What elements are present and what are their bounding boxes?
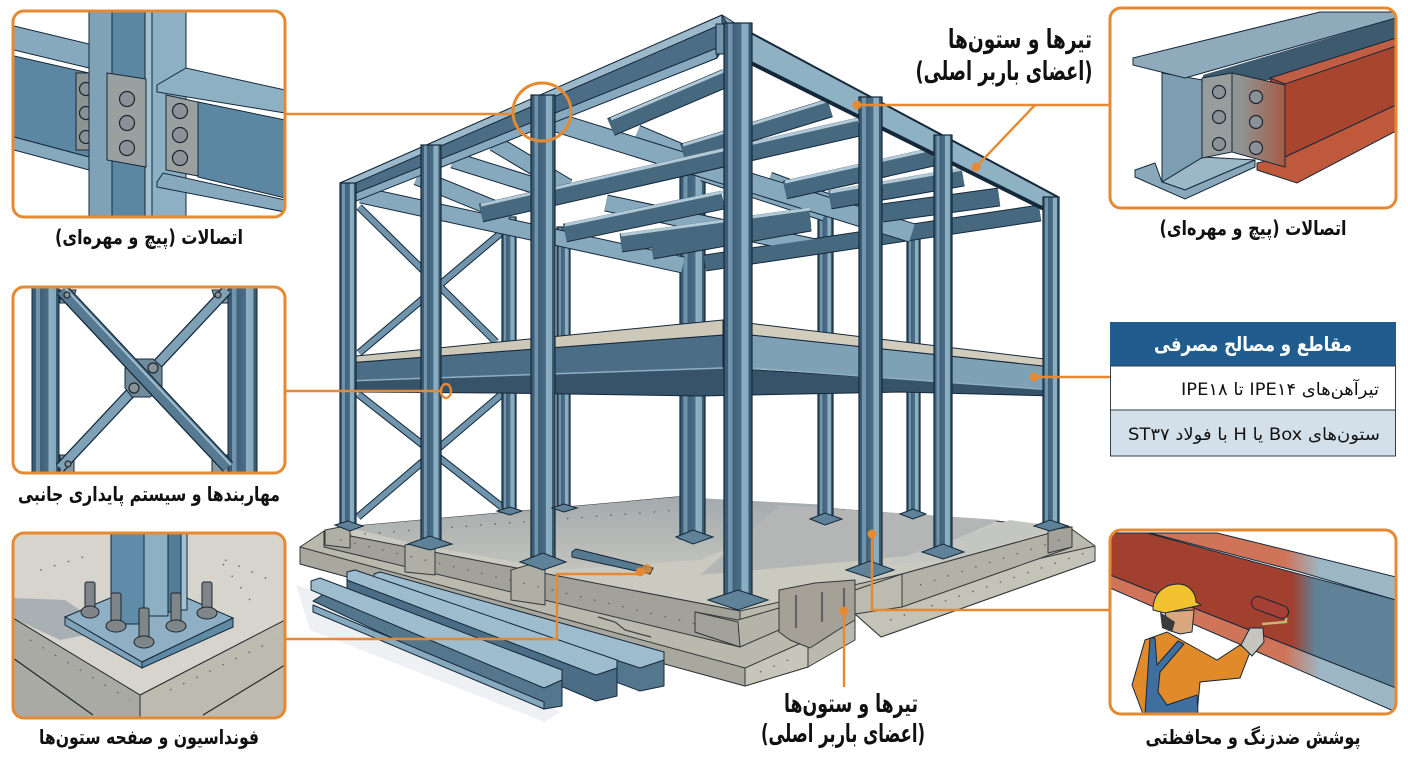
label: connections left: اتصالات (پیچ و مهره‌ای) bbox=[55, 225, 243, 250]
heading: beams and columns bottom: تیرها و ستون‌ها bbox=[784, 689, 918, 719]
icon: paint roller bbox=[1258, 603, 1286, 624]
panel: bracing bbox=[13, 287, 285, 473]
roof beams and joists bbox=[340, 15, 1058, 265]
table: sections and materials bbox=[1110, 322, 1396, 456]
main illustration: steel frame building bbox=[296, 15, 1095, 722]
heading: beams and columns top: تیرها و ستون‌ها bbox=[948, 25, 1092, 55]
heading: beams and columns bottom bbox=[761, 689, 925, 749]
callout line: foundation center label bbox=[840, 606, 848, 687]
callout line: materials table bbox=[1030, 372, 1111, 382]
callout line: foundation bbox=[285, 564, 652, 639]
base plates bbox=[335, 504, 1068, 610]
label: coating: پوشش ضدزنگ و محافظتی bbox=[1146, 725, 1360, 750]
panel: beam connection detail bbox=[1110, 8, 1396, 208]
rear columns bbox=[502, 165, 920, 539]
foundation slab bbox=[300, 497, 1095, 686]
heading: beams and columns top bbox=[916, 25, 1092, 87]
label: bracing: مهاربندها و سیستم پایداری جانبی bbox=[18, 482, 280, 507]
callout line: connection detail to roof joint bbox=[285, 83, 571, 141]
table: sections and materials: تیرآهن‌های IPE۱۴ تا IPE۱۸ bbox=[1181, 378, 1379, 400]
table: sections and materials: ستون‌های Box یا H با فولاد ST۳۷ bbox=[1128, 425, 1380, 445]
table: sections and materials: مقاطع و مصالح مصرفی bbox=[1154, 332, 1352, 356]
heading: beams and columns top: (اعضای باربر اصلی) bbox=[916, 57, 1092, 87]
callout line: beams and columns top bbox=[852, 100, 1111, 172]
panel: bolted connection bbox=[13, 11, 285, 217]
callout line: bracing to floor bbox=[285, 384, 451, 398]
label: connections right: اتصالات (پیچ و مهره‌ای) bbox=[1160, 216, 1346, 241]
back bracing X bbox=[358, 207, 502, 517]
panel: anti-rust coating bbox=[1110, 530, 1396, 714]
steel I-beams on the ground bbox=[311, 549, 664, 709]
ground shadow bbox=[296, 585, 560, 722]
label: foundation: فونداسیون و صفحه ستون‌ها bbox=[39, 725, 259, 749]
front columns bbox=[340, 23, 1059, 602]
panel: foundation and base plate bbox=[13, 533, 285, 718]
icon: worker bbox=[1132, 584, 1264, 714]
second floor slab and beams bbox=[346, 320, 1053, 396]
heading: beams and columns bottom: (اعضای باربر اصلی) bbox=[761, 719, 925, 749]
callout line: coating bbox=[868, 530, 1111, 610]
